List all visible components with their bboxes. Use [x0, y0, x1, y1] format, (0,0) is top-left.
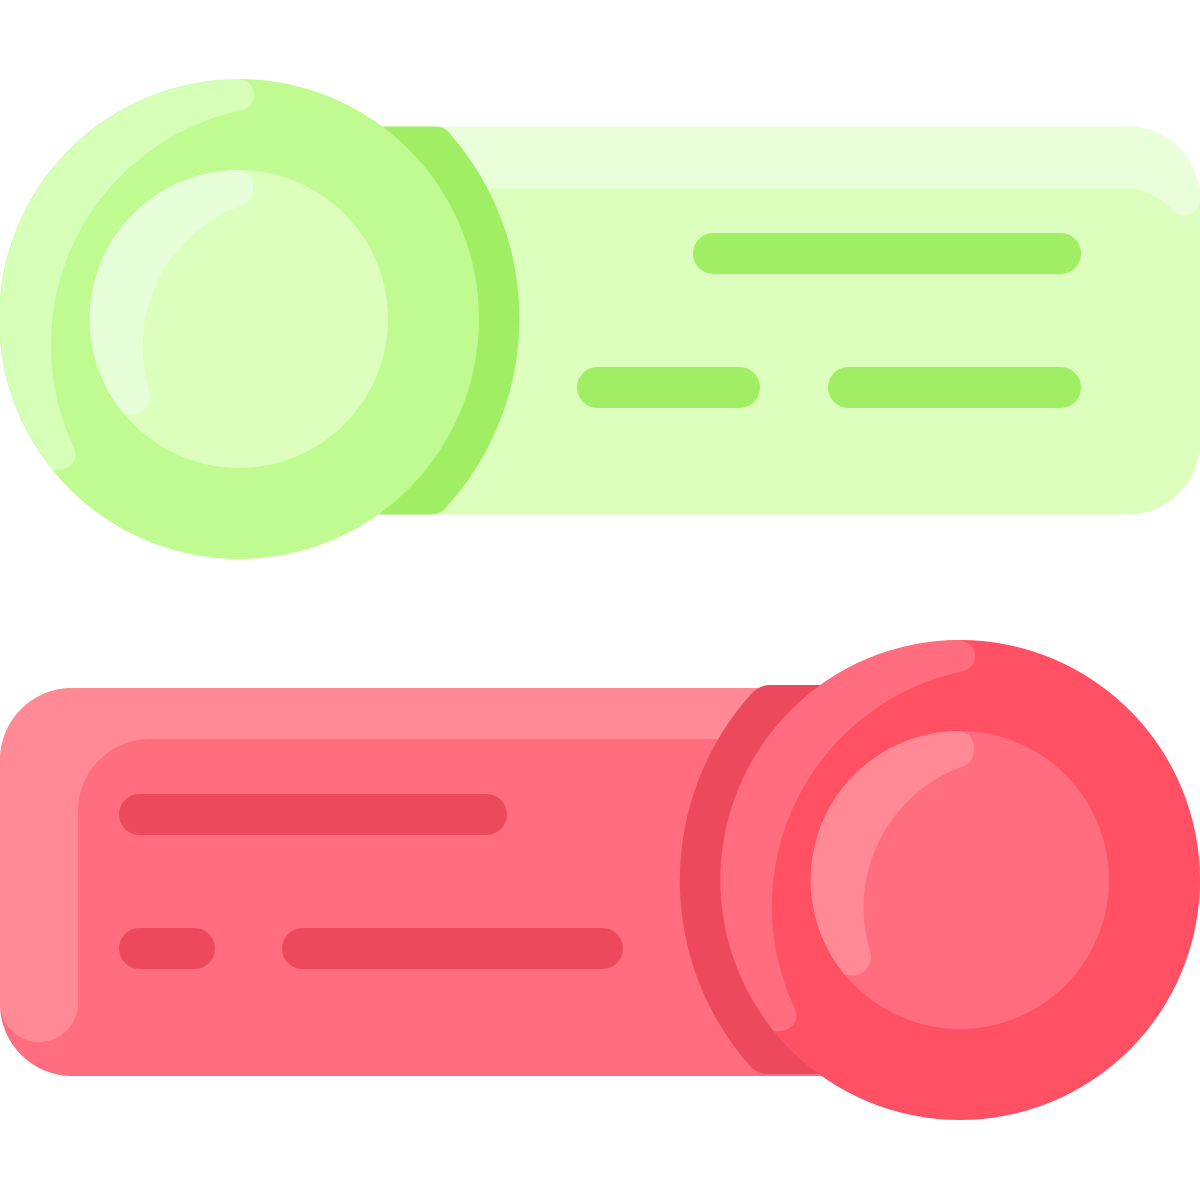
red knob crescent highlight: [721, 640, 975, 1031]
green knob: [0, 79, 479, 559]
red knob body: [720, 640, 1200, 1120]
red inner crescent highlight: [811, 731, 974, 975]
green label line bottom left: [577, 367, 760, 408]
green label line bottom right: [828, 367, 1081, 408]
red label line bottom right: [282, 928, 623, 969]
green label line top: [693, 233, 1081, 274]
red track highlight: [0, 688, 800, 1042]
green inner button: [90, 170, 388, 468]
green inner crescent highlight: [90, 170, 253, 414]
red knob shadow: [680, 685, 900, 1074]
red track: [0, 688, 900, 1076]
green track: [300, 126, 1200, 514]
green knob shadow: [300, 126, 519, 514]
green knob body: [0, 79, 479, 559]
panel: red off switch: [0, 640, 1200, 1120]
green inner button face: [90, 170, 388, 468]
panel: green on switch: [0, 79, 1200, 559]
green knob crescent highlight: [0, 79, 254, 470]
green track top highlight: [400, 126, 1200, 215]
red knob: [720, 640, 1200, 1120]
red label line top: [119, 794, 507, 835]
red inner button face: [811, 731, 1109, 1029]
red label line bottom left: [119, 928, 215, 969]
red inner button: [811, 731, 1109, 1029]
